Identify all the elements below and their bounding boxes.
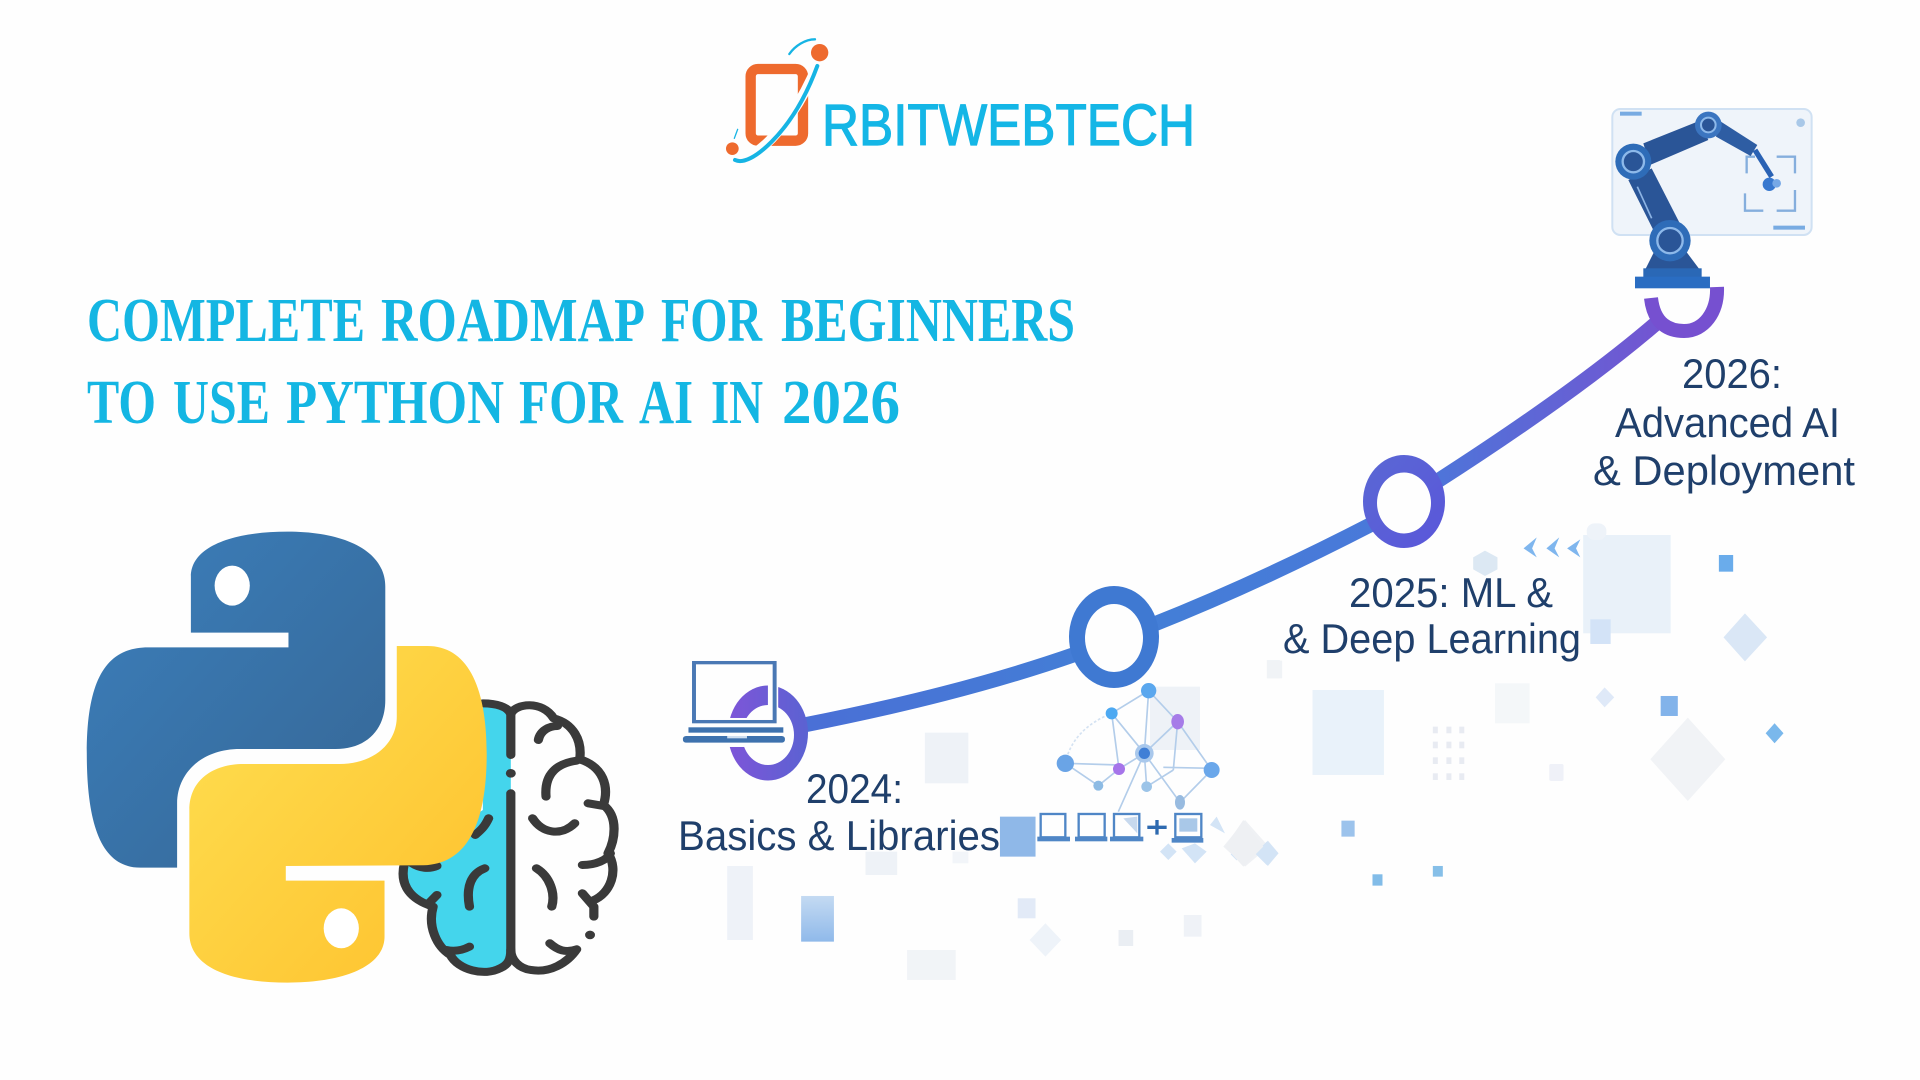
background decorative shapes: left cluster [727, 660, 1280, 980]
title: PYTHON [286, 369, 504, 437]
icon: laptop [660, 663, 785, 747]
label: 2024 [678, 765, 1000, 859]
title: FOR [519, 369, 624, 437]
label: 2026: Advanced AI [1615, 399, 1840, 446]
title: COMPLETE [87, 287, 365, 355]
title: 2026 [782, 369, 900, 437]
label: 2026: 2026: [1682, 350, 1782, 397]
robot arm [1615, 112, 1781, 288]
logo: Orbitwebtech [726, 39, 1195, 161]
label: 2026 [1593, 350, 1855, 494]
background decorative shapes: right cluster [1257, 523, 1784, 886]
title: IN [711, 369, 763, 437]
title: ROADMAP [381, 287, 645, 355]
title: FOR [661, 287, 763, 355]
label: 2025: & Deep Learning [1283, 615, 1581, 662]
icon: python yellow snake [189, 646, 487, 983]
roadmap line [804, 320, 1660, 725]
logo icon: orange tablet and orbit [726, 39, 828, 161]
icon: python logo with brain [87, 532, 614, 983]
label: 2025 [1283, 569, 1581, 662]
milestone ring 2025 [1363, 455, 1445, 548]
milestone ring 2025 node [1069, 586, 1159, 688]
milestone ring 2026 [1651, 287, 1717, 331]
title: BEGINNERS [781, 287, 1075, 355]
title: AI [639, 369, 693, 437]
title [87, 287, 1075, 437]
title: TO [87, 369, 156, 437]
icon: python blue snake [87, 532, 385, 868]
label: 2024: 2024: [806, 765, 903, 812]
label: 2026: & Deployment [1593, 447, 1855, 494]
milestone ring 2024 [728, 686, 808, 780]
icon: robot arm panel [1612, 109, 1812, 288]
logo wordmark: RBITWEBTECH [822, 93, 1195, 158]
title: USE [173, 369, 270, 437]
label: 2024: Basics & Libraries [678, 812, 1000, 859]
icon: row of small laptops [1037, 814, 1278, 867]
icon: neural network [1057, 683, 1220, 812]
label: 2025: 2025: ML & [1349, 569, 1553, 616]
icon: brain [403, 703, 614, 972]
